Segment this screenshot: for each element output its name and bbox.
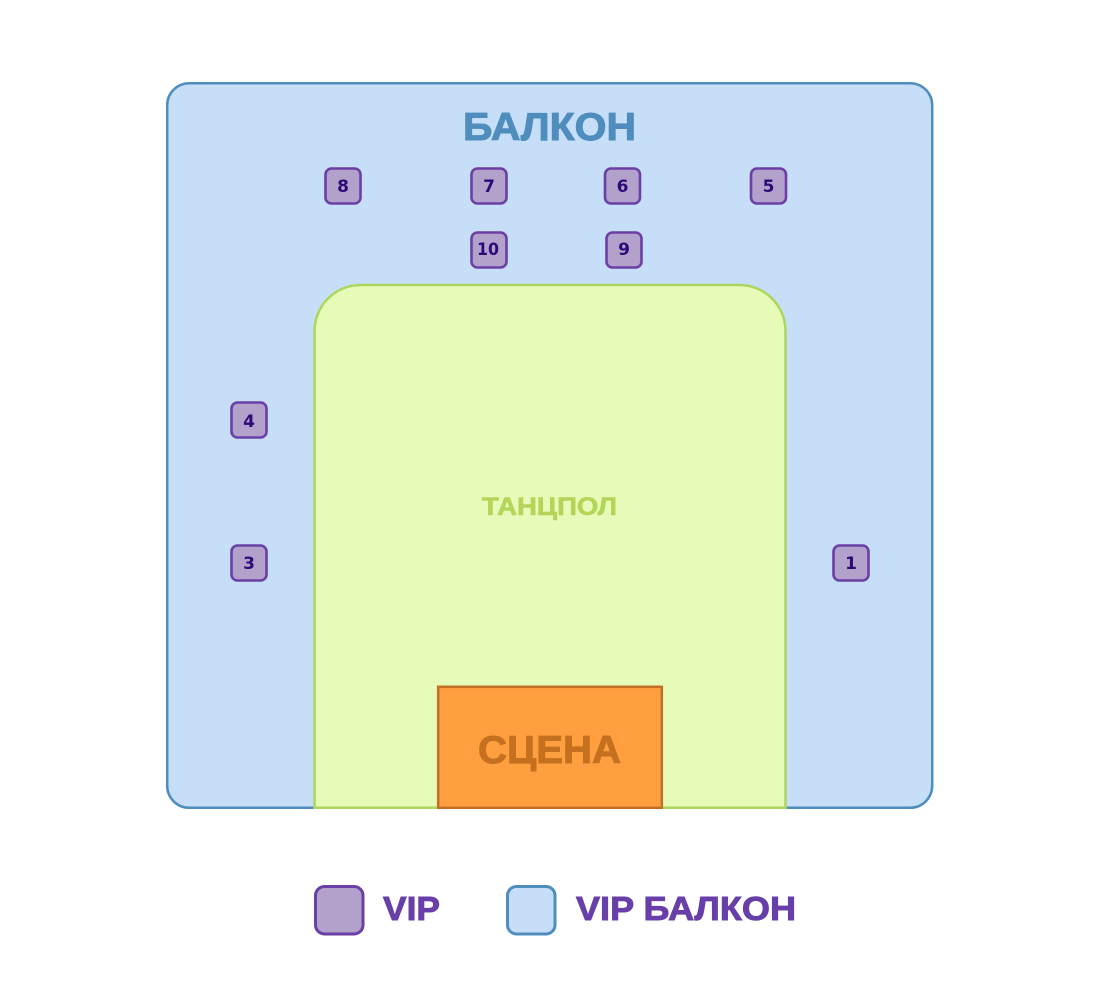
VIP table 7: 7 xyxy=(483,177,495,197)
VIP table 9 xyxy=(606,232,642,268)
legend: VIP: VIP xyxy=(383,890,440,927)
VIP table 3 xyxy=(232,546,266,580)
VIP table 7 xyxy=(472,168,506,204)
label: dance floor: ТАНЦПОЛ xyxy=(482,493,617,521)
legend: VIP xyxy=(316,886,440,934)
VIP table 5 xyxy=(751,168,786,204)
VIP table 10: 10 xyxy=(477,240,499,260)
VIP table 6 xyxy=(605,168,640,204)
panel: stage xyxy=(438,687,662,808)
legend: VIP balcony xyxy=(508,886,796,934)
VIP table 6: 6 xyxy=(617,177,628,197)
VIP table 8 xyxy=(326,168,360,204)
legend: VIP balcony: VIP БАЛКОН xyxy=(576,890,796,927)
label: stage: СЦЕНА xyxy=(478,729,621,772)
VIP table 10 xyxy=(472,232,506,268)
VIP table 1 xyxy=(834,546,868,580)
VIP table 5: 5 xyxy=(763,177,774,197)
VIP table 4 xyxy=(232,402,266,438)
panel: dance floor xyxy=(314,285,786,808)
VIP table 8: 8 xyxy=(337,177,349,197)
heading: balcony: БАЛКОН xyxy=(463,106,636,149)
VIP table 9: 9 xyxy=(618,240,630,260)
VIP table 4: 4 xyxy=(243,412,255,432)
VIP table 3: 3 xyxy=(243,554,255,574)
VIP table 1: 1 xyxy=(845,554,857,574)
